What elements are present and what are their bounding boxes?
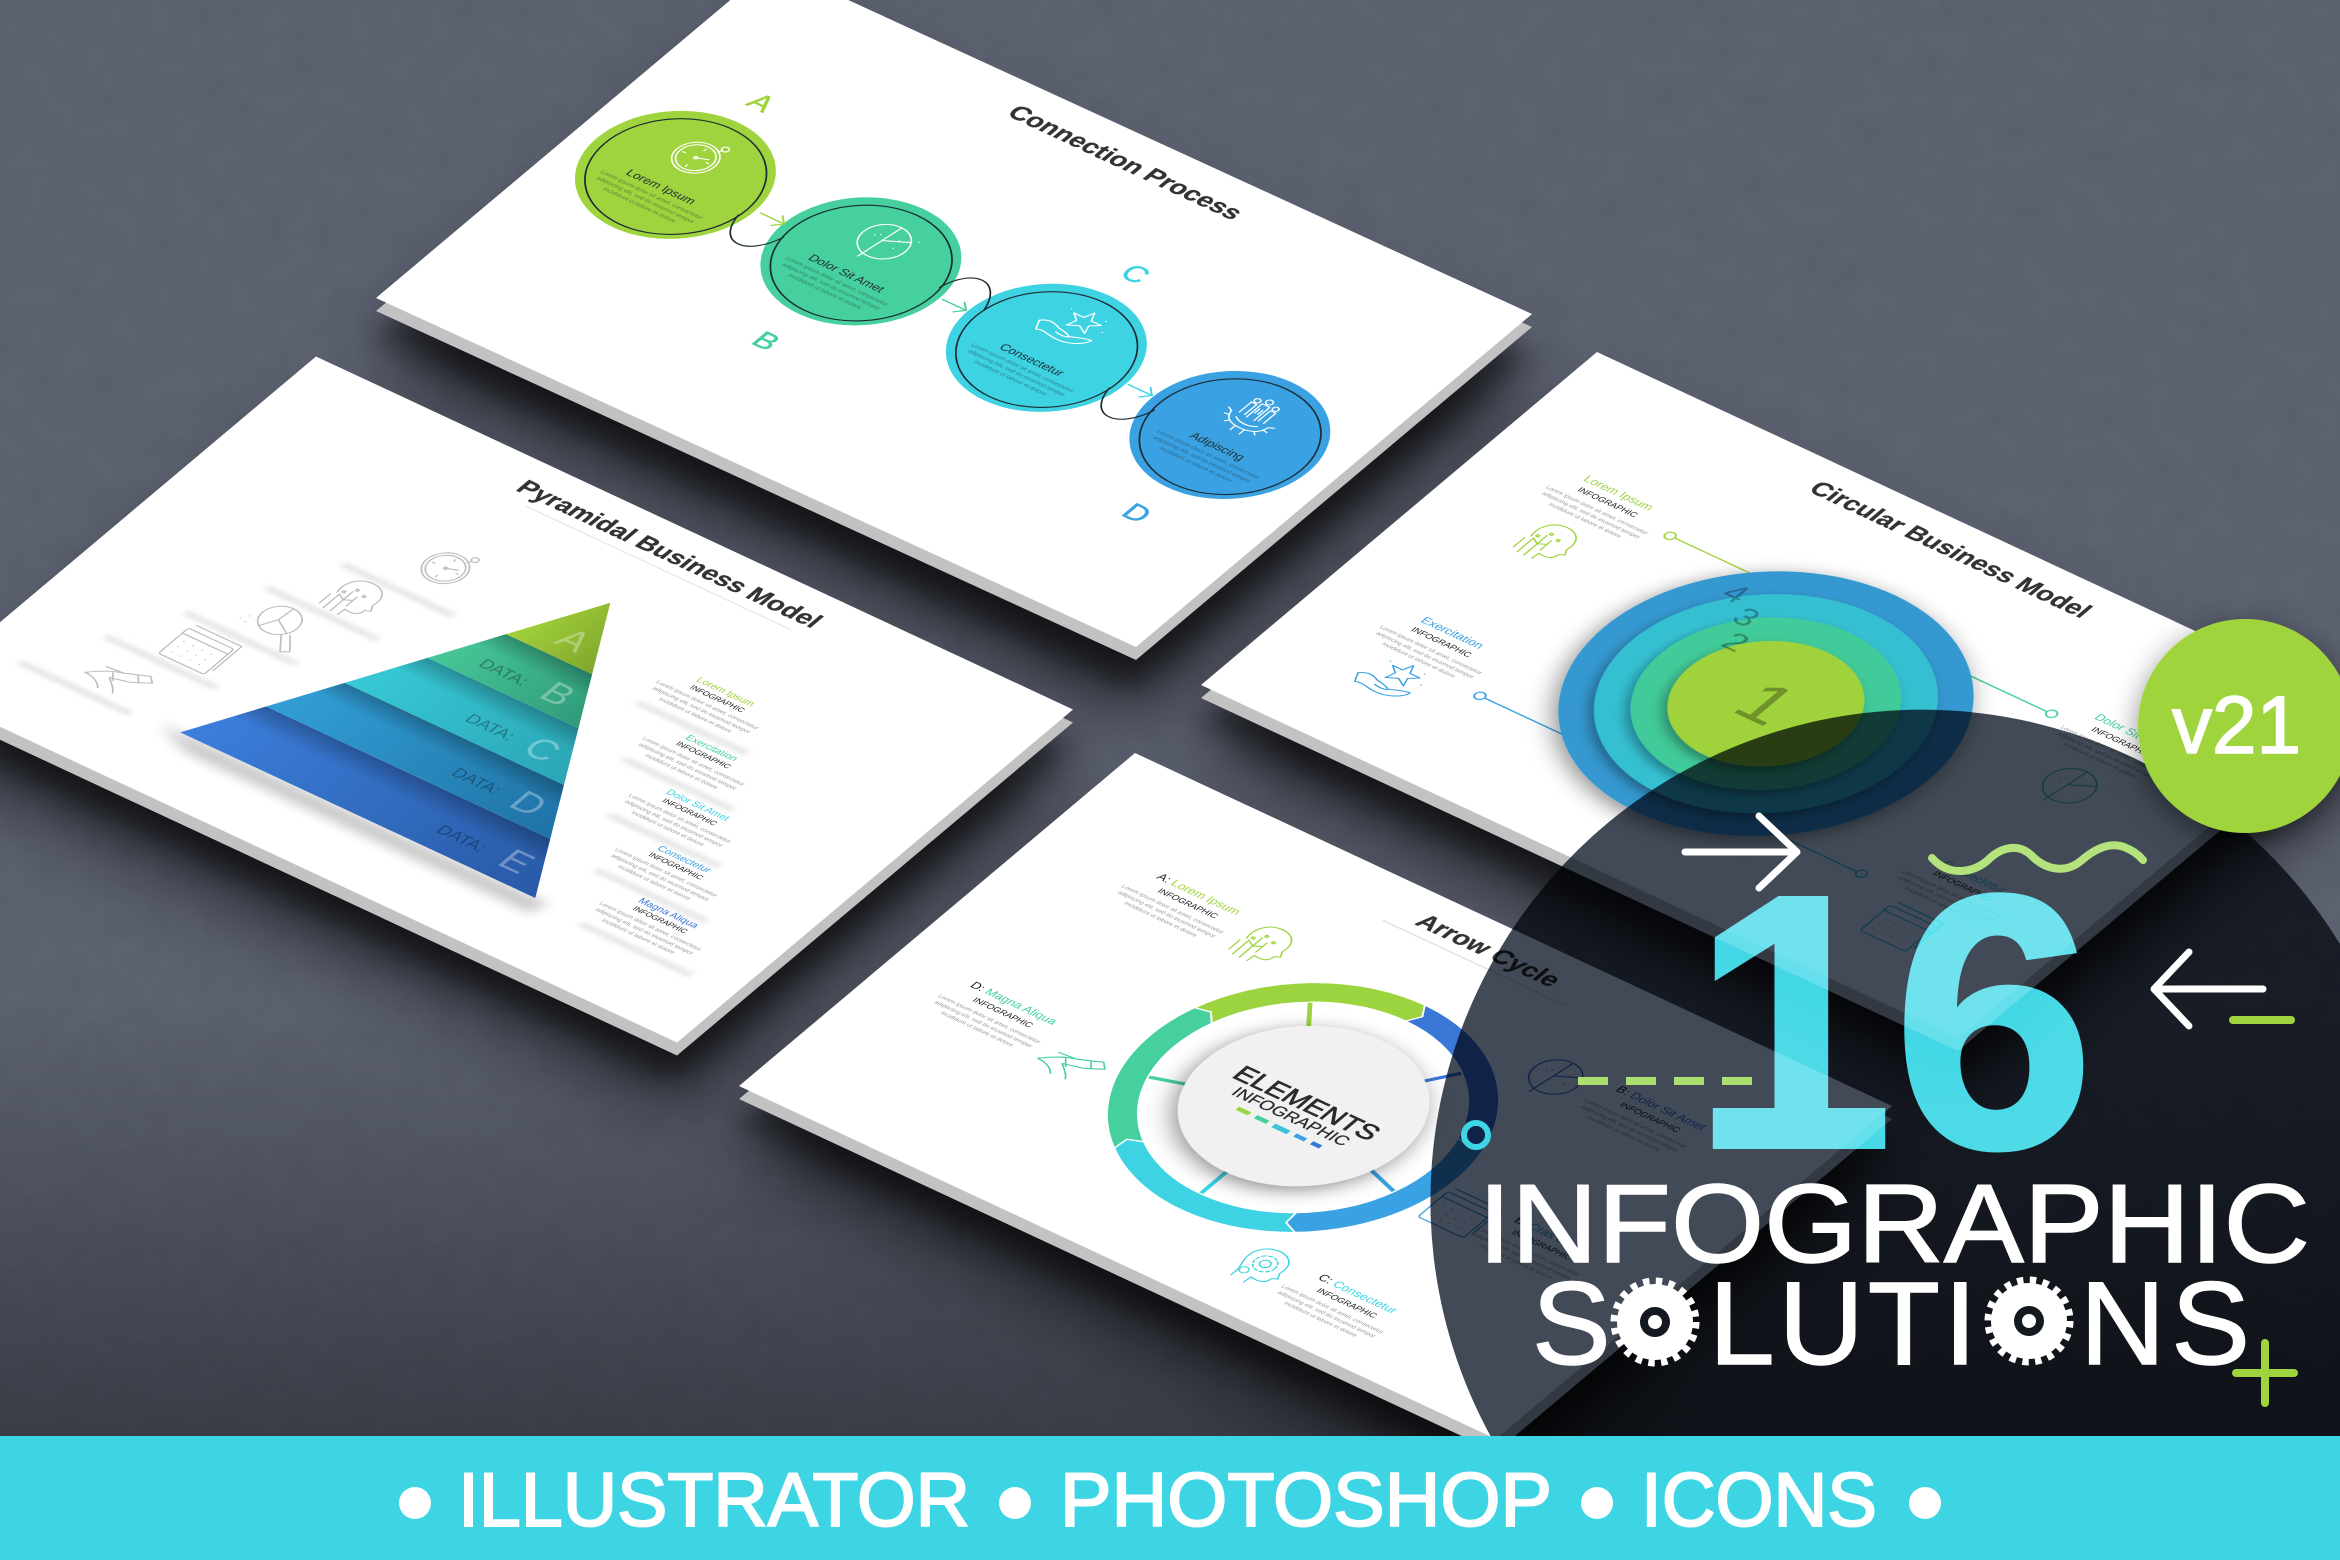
pyramid base shadow	[147, 723, 548, 915]
text block: consectetur: INFOGRAPHIC	[646, 851, 706, 881]
text block A	[1108, 864, 1249, 945]
step letters	[559, 87, 1340, 529]
arrow: right white	[1685, 816, 1797, 888]
green dashed line	[1578, 1077, 1752, 1085]
text block: magna aliqua: Magna Aliqua	[635, 897, 701, 930]
big number 16: 16	[1692, 819, 2094, 1224]
text block: lorem ipsum	[642, 665, 778, 741]
text block: exercitation: incididunt ut labore et dolore	[1380, 642, 1457, 679]
version badge: v21	[2172, 680, 2301, 771]
title: solutions: LUTI	[1709, 1258, 1981, 1390]
step A blob: adipiscing elit, sed do eiusmod tempor	[595, 176, 695, 225]
text block A: INFOGRAPHIC	[1155, 887, 1221, 920]
concentric circles chart: 1	[1718, 670, 1814, 737]
concentric circles chart: 2	[1714, 627, 1757, 657]
bottom banner	[0, 1436, 2340, 1560]
heading: pyramidal business model: Pyramidal Business Model	[510, 476, 828, 632]
text block E	[1463, 1206, 1605, 1287]
pyramid chart: DATA:	[461, 711, 519, 744]
text block A: incididunt ut labore et dolore	[1122, 901, 1199, 939]
text block: exercitation: INFOGRAPHIC	[674, 740, 733, 770]
icon: pie B	[1514, 1053, 1595, 1105]
step B blob: Dolor Sit Amet	[805, 252, 888, 295]
text block D: INFOGRAPHIC	[970, 996, 1036, 1029]
text block C	[1267, 1264, 1409, 1345]
green plus	[2236, 1343, 2294, 1403]
icon: gear O left	[1615, 1282, 1695, 1362]
bottom banner: PHOTOSHOP	[1060, 1458, 1552, 1543]
text block D: Lorem ipsum dolor sit amet, consectetur	[936, 994, 1041, 1045]
text block: exercitation: adipiscing elit, sed do eiusmod tempor	[1374, 631, 1475, 680]
text block: lorem ipsum: Lorem Ipsum	[693, 676, 757, 709]
step letters: C	[1113, 260, 1156, 289]
leader lines	[1472, 531, 2060, 879]
text block: exercitation: incididunt ut labore et dolore	[643, 754, 719, 791]
text block E: adipiscing elit, sed do eiusmod tempor	[1471, 1233, 1572, 1281]
text block: dolor sit amet	[615, 778, 750, 854]
panel: connection process slide	[376, 0, 1532, 660]
text block D: D: Magna Aliqua	[967, 979, 1061, 1027]
right shelf strips	[445, 700, 883, 977]
pyramid chart: D	[501, 784, 557, 822]
text block: dolor sit amet: adipiscing elit, sed do eiusmod tempor	[623, 800, 724, 848]
text block: dolor sit amet: INFOGRAPHIC	[660, 797, 719, 827]
text block: lorem ipsum: Lorem ipsum dolor sit amet, consectetur	[654, 680, 759, 731]
step A blob: incididunt ut labore et dolore	[601, 187, 677, 224]
text block C: adipiscing elit, sed do eiusmod tempor	[1276, 1290, 1376, 1339]
pyramid chart: DATA:	[447, 765, 506, 798]
step B blob	[720, 172, 1002, 351]
text block E: E: Cras Lorem	[1511, 1214, 1595, 1257]
step C blob: Consectetur	[996, 341, 1068, 379]
step C blob: adipiscing elit, sed do eiusmod tempor	[965, 349, 1066, 398]
heading: connection process: Connection Process	[1001, 101, 1249, 224]
text block C: Lorem ipsum dolor sit amet, consectetur	[1279, 1284, 1385, 1335]
text block: consectetur: Consectetur	[654, 844, 714, 875]
pyramid chart: B	[531, 675, 585, 712]
text block: lorem ipsum: Lorem Ipsum	[1580, 473, 1657, 513]
step letters: A	[740, 89, 782, 118]
text block: exercitation: Lorem ipsum dolor sit amet, consectetur	[640, 737, 746, 787]
text block: exercitation	[1366, 605, 1507, 686]
text block: magna aliqua: adipiscing elit, sed do eiusmod tempor	[593, 908, 694, 956]
text block: exercitation: Lorem ipsum dolor sit amet, consectetur	[1378, 625, 1483, 676]
icon: gear O right	[1989, 1281, 2069, 1361]
bottom banner: ICONS	[1641, 1458, 1877, 1543]
text block: lorem ipsum: incididunt ut labore et dolore	[1547, 502, 1623, 540]
icon: gear head C	[1226, 1244, 1299, 1291]
arrows between blobs	[753, 208, 1158, 402]
icon: hand and star	[1350, 652, 1433, 703]
text block A: Lorem ipsum dolor sit amet, consectetur	[1120, 884, 1225, 935]
icon: pie	[2028, 762, 2109, 813]
text block: dolor sit amet: incididunt ut labore et dolore	[629, 811, 706, 848]
step B blob: incididunt ut labore et dolore	[787, 274, 863, 311]
text block: lorem ipsum: adipiscing elit, sed do eiusmod tempor	[1540, 491, 1641, 540]
icon: head A	[1227, 921, 1302, 969]
step A blob	[534, 86, 817, 264]
text block: exercitation: INFOGRAPHIC	[1409, 625, 1475, 659]
icon: head	[1511, 518, 1587, 567]
text block: consectetur: Lorem ipsum dolor sit amet, consectetur	[1900, 870, 2005, 920]
text block: dolor sit amet	[2047, 705, 2188, 786]
blob connectors	[716, 184, 1192, 428]
text block E: incididunt ut labore et dolore	[1478, 1244, 1554, 1281]
text block A: A: Lorem Ipsum	[1154, 871, 1244, 917]
text block: dolor sit amet: Lorem ipsum dolor sit amet, consectetur	[2059, 725, 2164, 776]
left icon shelf strips	[17, 500, 456, 778]
step D blob: Adipiscing	[1186, 430, 1248, 463]
text block: consectetur: Lorem ipsum dolor sit amet, consectetur	[613, 848, 718, 898]
version badge	[2138, 619, 2340, 833]
pyramid chart: DATA:	[432, 822, 491, 855]
arrow: left white	[2154, 952, 2263, 1026]
title: solutions: NS	[2080, 1258, 2256, 1390]
green dash	[2233, 1016, 2291, 1024]
text block A: adipiscing elit, sed do eiusmod tempor	[1116, 890, 1217, 939]
text block E: Lorem ipsum dolor sit amet, consectetur	[1475, 1227, 1580, 1277]
arrow cycle ring chart	[1028, 933, 1578, 1282]
text block: lorem ipsum: INFOGRAPHIC	[688, 684, 747, 714]
bottom banner: ILLUSTRATOR	[458, 1458, 970, 1543]
text block B: adipiscing elit, sed do eiusmod tempor	[1579, 1105, 1680, 1153]
grey icons	[78, 481, 484, 758]
text block: magna aliqua	[585, 886, 721, 962]
pyramid chart: C	[514, 730, 571, 768]
panel: arrow cycle slide	[739, 753, 1892, 1452]
text block D: incididunt ut labore et dolore	[939, 1011, 1015, 1048]
text block: magna aliqua: INFOGRAPHIC	[631, 905, 690, 935]
heading: circular business model: Circular Business Model	[1803, 477, 2097, 622]
text block: lorem ipsum: incididunt ut labore et dolore	[657, 697, 733, 734]
text block B: B: Dolor Sit Amet	[1613, 1084, 1710, 1133]
panel: pyramidal business model slide	[0, 356, 1073, 1055]
icon: pen D	[1031, 1041, 1110, 1088]
panel: circular business model slide	[1201, 352, 2340, 1051]
green wave	[1932, 845, 2143, 871]
text block: lorem ipsum: INFOGRAPHIC	[1575, 486, 1641, 519]
text block: exercitation: adipiscing elit, sed do eiusmod tempor	[637, 743, 737, 791]
text block: lorem ipsum: adipiscing elit, sed do eiusmod tempor	[650, 686, 751, 735]
text block: magna aliqua: Lorem ipsum dolor sit amet, consectetur	[597, 901, 702, 952]
dark circle overlay	[1430, 710, 2340, 1436]
text block C: INFOGRAPHIC	[1314, 1286, 1380, 1320]
step letters: D	[1115, 499, 1158, 528]
text block D: adipiscing elit, sed do eiusmod tempor	[932, 1000, 1033, 1049]
step A blob: Lorem Ipsum	[623, 167, 699, 207]
heading: arrow cycle: Arrow Cycle	[1409, 910, 1567, 991]
text block D	[924, 974, 1066, 1055]
text block: dolor sit amet: INFOGRAPHIC	[2089, 725, 2155, 759]
step D blob: Lorem ipsum dolor sit amet, consectetur	[1155, 430, 1260, 480]
step D blob: adipiscing elit, sed do eiusmod tempor	[1151, 436, 1252, 484]
background bottom shading	[0, 1000, 2340, 1440]
step C blob	[905, 259, 1187, 437]
center disc with title	[1127, 995, 1480, 1218]
text block E: INFOGRAPHIC	[1509, 1228, 1575, 1262]
concentric circles chart	[1474, 519, 2058, 888]
concentric circles chart: 4	[1714, 578, 1758, 609]
text block: dolor sit amet: Dolor Sit Amet	[2091, 712, 2175, 754]
pyramid chart	[180, 520, 788, 898]
text block: consectetur: incididunt ut labore et dolore	[1903, 887, 1979, 924]
text block: exercitation	[628, 721, 764, 797]
step letters: B	[745, 327, 786, 356]
pyramid chart: E	[490, 843, 544, 880]
text block: lorem ipsum	[1532, 465, 1673, 546]
pyramid chart: A	[547, 621, 601, 658]
text block C: incididunt ut labore et dolore	[1282, 1301, 1358, 1339]
text block B: INFOGRAPHIC	[1618, 1101, 1683, 1134]
title: infographic: INFOGRAPHIC	[1478, 1162, 2310, 1286]
step A blob: Lorem ipsum dolor sit amet, consectetur	[598, 170, 704, 221]
text block B: Lorem ipsum dolor sit amet, consectetur	[1583, 1099, 1688, 1149]
icon: calendar	[1860, 901, 1943, 953]
center disc with title: INFOGRAPHIC	[1227, 1084, 1355, 1149]
step C blob: Lorem ipsum dolor sit amet, consectetur	[969, 343, 1074, 394]
text block: dolor sit amet: Dolor Sit Amet	[663, 788, 732, 823]
text block C: C: Consectetur	[1315, 1272, 1401, 1316]
text block: consectetur: incididunt ut labore et dolore	[616, 865, 692, 902]
step B blob: Lorem ipsum dolor sit amet, consectetur	[784, 257, 889, 307]
step D blob: incididunt ut labore et dolore	[1158, 446, 1234, 484]
text block: consectetur: adipiscing elit, sed do eiusmod tempor	[1896, 876, 1997, 924]
text block: dolor sit amet: adipiscing elit, sed do eiusmod tempor	[2055, 732, 2156, 780]
text block: dolor sit amet: incididunt ut labore et dolore	[2061, 742, 2138, 780]
concentric circles chart: 3	[1725, 602, 1768, 632]
text block: lorem ipsum: Lorem ipsum dolor sit amet, consectetur	[1544, 485, 1649, 536]
text block: consectetur	[1888, 849, 2030, 930]
step D blob	[1089, 346, 1371, 524]
title: solutions: S	[1532, 1258, 1611, 1390]
cyan ring	[1464, 1123, 1488, 1147]
center disc with title: ELEMENTS	[1226, 1061, 1388, 1145]
icon: calendar E	[1418, 1187, 1501, 1239]
text block: consectetur	[601, 832, 737, 908]
text block B: incididunt ut labore et dolore	[1585, 1116, 1662, 1153]
text block: dolor sit amet: Lorem ipsum dolor sit amet, consectetur	[627, 794, 732, 844]
text block: consectetur: Consectetur	[1938, 858, 2010, 896]
text block: magna aliqua: incididunt ut labore et dolore	[600, 918, 676, 956]
text block B	[1571, 1078, 1712, 1160]
step C blob: incididunt ut labore et dolore	[972, 360, 1048, 397]
pyramid chart: DATA:	[474, 656, 533, 689]
text block: exercitation: Exercitation	[1418, 615, 1487, 651]
text block: consectetur: adipiscing elit, sed do eiusmod tempor	[609, 854, 710, 902]
text block: consectetur: INFOGRAPHIC	[1931, 870, 1996, 903]
text block: exercitation: Exercitation	[682, 734, 740, 763]
step B blob: adipiscing elit, sed do eiusmod tempor	[780, 263, 881, 311]
